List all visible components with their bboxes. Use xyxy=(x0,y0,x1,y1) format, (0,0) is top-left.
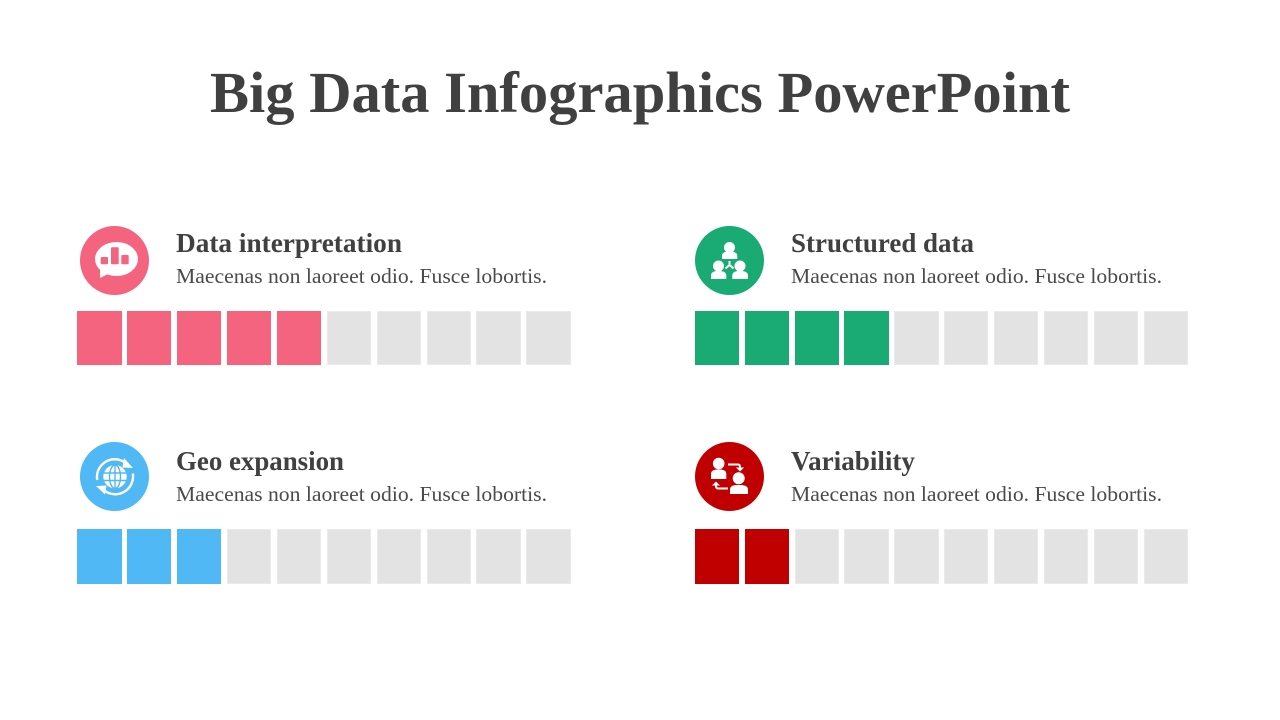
panel: geo expansion xyxy=(77,442,570,584)
heading: structured data: Structured data xyxy=(791,228,974,258)
progress bar: 3 of 10 xyxy=(77,529,570,584)
panel: data interpretation xyxy=(77,226,570,365)
description: variability: Maecenas non laoreet odio. Fusce lobortis. xyxy=(791,482,1162,506)
heading: data interpretation: Data interpretation xyxy=(176,228,402,258)
icon: people exchange xyxy=(695,442,764,511)
progress bar: 5 of 10 xyxy=(77,311,570,365)
icon: rotating globe xyxy=(80,442,149,511)
panel: structured data xyxy=(695,226,1188,365)
progress bar: 4 of 10 xyxy=(695,311,1188,365)
panel: variability xyxy=(695,442,1188,584)
description: structured data: Maecenas non laoreet odio. Fusce lobortis. xyxy=(791,264,1162,288)
description: geo expansion: Maecenas non laoreet odio. Fusce lobortis. xyxy=(176,482,547,506)
heading: variability: Variability xyxy=(791,446,915,476)
icon: people hierarchy xyxy=(695,226,764,295)
icon: chart speech bubble xyxy=(80,226,149,295)
title: Big Data Infographics PowerPoint xyxy=(210,60,1071,125)
description: data interpretation: Maecenas non laoreet odio. Fusce lobortis. xyxy=(176,264,547,288)
heading: geo expansion: Geo expansion xyxy=(176,446,344,476)
progress bar: 2 of 10 xyxy=(695,529,1188,584)
